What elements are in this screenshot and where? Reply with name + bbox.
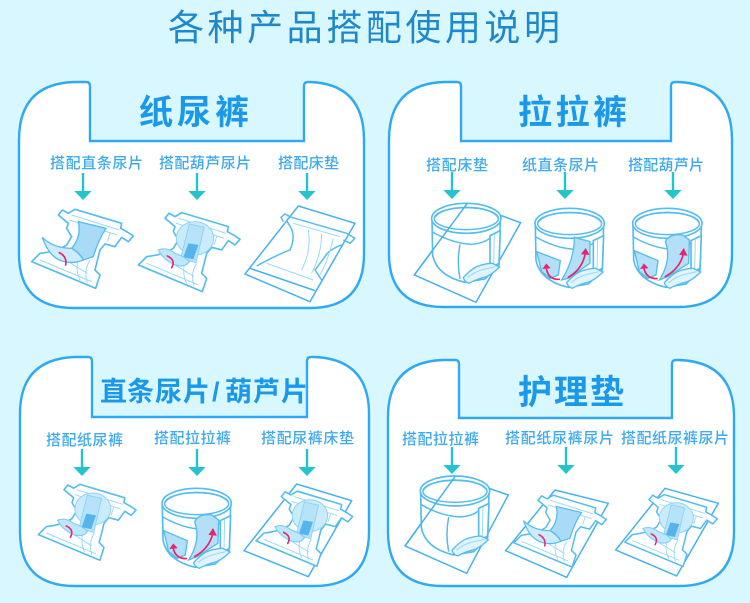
label: diaper and bed pad: 搭配尿裤床垫	[261, 429, 354, 447]
heading: 护理垫	[518, 374, 624, 412]
heading: 直条尿片/葫芦片	[100, 377, 308, 407]
label: bed pad: 搭配床垫	[278, 154, 339, 172]
icon: pull-up on bed pad	[405, 476, 508, 573]
label: gourd pad: 搭配葫芦尿片	[159, 155, 251, 172]
icon: pull-up on bed pad	[414, 203, 521, 302]
icon: diaper with gourd pad on bed pad	[616, 488, 718, 576]
icon: pull-up with gourd pad	[633, 208, 702, 288]
label: straight pad: 搭配直条尿片	[50, 155, 143, 172]
panel: 纸尿裤	[19, 82, 364, 308]
panel: 护理垫	[388, 360, 734, 586]
panel frame	[20, 357, 369, 586]
label: pull-up: 搭配拉拉裤	[154, 429, 231, 447]
label: diaper: 搭配纸尿裤	[46, 432, 123, 449]
label: straight pad: 纸直条尿片	[522, 157, 599, 174]
icon: diaper with straight pad on bed pad	[506, 490, 608, 577]
panel frame	[19, 82, 364, 308]
arrow	[188, 449, 206, 476]
label: gourd pad: 搭配葫芦片	[628, 157, 704, 174]
arrow	[188, 173, 206, 200]
heading: 纸尿裤	[139, 94, 249, 132]
title: 各种产品搭配使用说明	[168, 7, 560, 48]
panel frame	[388, 360, 734, 586]
panel: 拉拉裤	[389, 82, 732, 307]
panel: 直条尿片/葫芦片	[20, 357, 369, 586]
arrow	[298, 173, 316, 200]
arrow	[664, 172, 682, 199]
icon: pull-up with gourd pad	[162, 488, 231, 568]
icon: diaper with gourd pad	[38, 484, 136, 560]
arrow	[298, 449, 316, 476]
label: diaper pad: 搭配纸尿裤尿片	[621, 430, 729, 447]
icon: pull-up with straight pad	[535, 208, 604, 288]
arrow	[667, 447, 685, 474]
heading: 拉拉裤	[518, 94, 627, 132]
arrow	[73, 449, 91, 476]
arrow	[74, 173, 92, 200]
icon: diaper with gourd pad on bed pad	[244, 484, 353, 577]
label: diaper pad: 搭配纸尿裤尿片	[505, 430, 614, 447]
icon: diaper on bed pad	[245, 206, 355, 302]
icon: diaper with gourd pad	[138, 213, 240, 292]
icon: diaper with straight pad	[32, 209, 133, 288]
label: pull-up: 搭配拉拉裤	[402, 430, 479, 448]
arrow	[556, 172, 574, 199]
arrow	[443, 447, 461, 474]
panel frame	[389, 82, 732, 307]
arrow	[557, 447, 575, 474]
arrow	[443, 172, 461, 199]
label: bed pad: 搭配床垫	[426, 156, 488, 174]
